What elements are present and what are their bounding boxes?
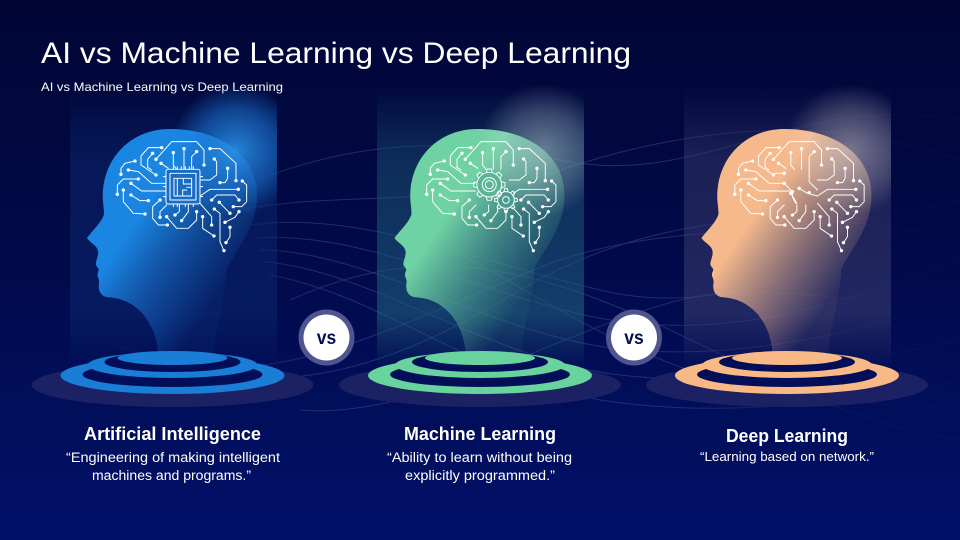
platform <box>339 351 621 407</box>
head silhouette <box>702 129 872 352</box>
brain circuit network <box>733 142 864 252</box>
description: “Ability to learn without being <box>387 450 572 465</box>
panel: machine learning <box>339 85 621 483</box>
heading: Machine Learning <box>404 424 556 444</box>
glow <box>377 85 584 220</box>
vs badge 2 <box>606 310 662 366</box>
brain circuit with gears <box>425 142 556 252</box>
panel: deep learning <box>646 85 928 464</box>
glow <box>70 85 277 220</box>
description <box>387 450 572 483</box>
heading: Artificial Intelligence <box>84 424 261 444</box>
description: machines and programs.” <box>92 468 251 483</box>
vs badge 2: vs <box>624 328 644 349</box>
background wave lines <box>110 114 960 440</box>
title: AI vs Machine Learning vs Deep Learning <box>41 37 631 70</box>
heading: Deep Learning <box>726 426 848 446</box>
head silhouette <box>87 129 257 352</box>
platform <box>32 351 314 407</box>
head silhouette <box>394 129 564 352</box>
platform <box>646 351 928 407</box>
brain circuit with chip <box>116 142 247 252</box>
light column <box>70 85 277 370</box>
description: “Engineering of making intelligent <box>66 450 280 465</box>
light column <box>377 85 584 370</box>
glow <box>684 85 891 220</box>
subtitle: AI vs Machine Learning vs Deep Learning <box>41 80 283 94</box>
description <box>66 450 280 483</box>
description: “Learning based on network.” <box>700 450 874 464</box>
vs badge 1: vs <box>317 328 336 349</box>
light column <box>684 85 891 370</box>
panel: artificial intelligence <box>32 85 314 483</box>
vs badge 1 <box>298 310 354 366</box>
description: explicitly programmed.” <box>405 468 555 483</box>
